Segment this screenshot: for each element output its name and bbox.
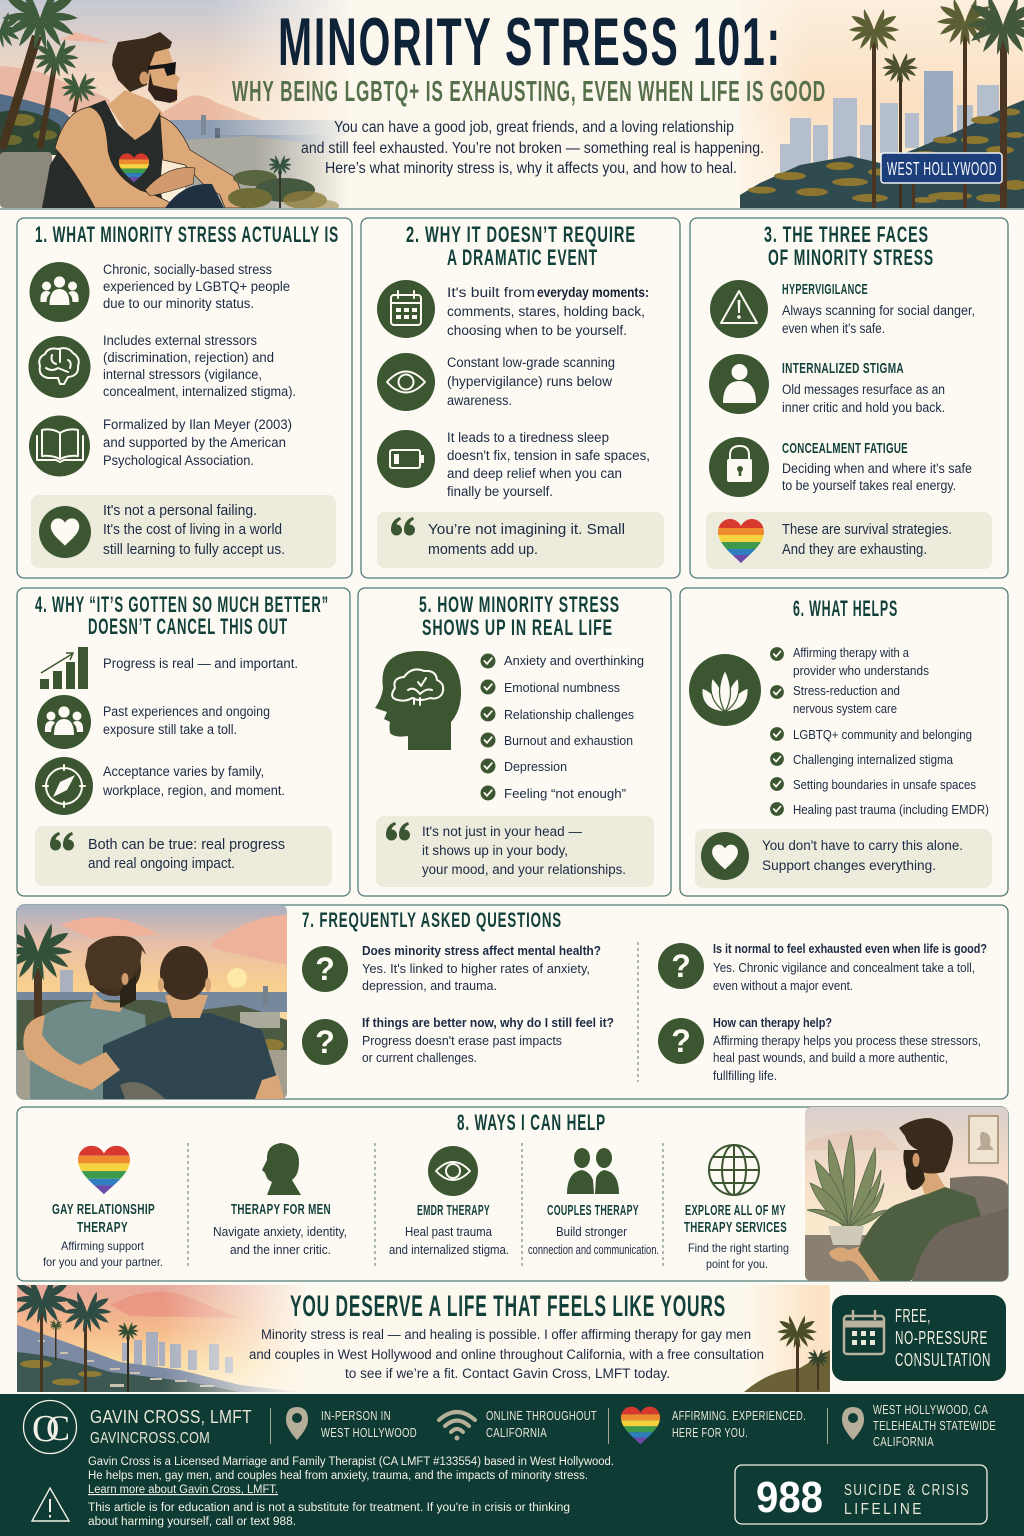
text: stressors: Includes external stressors xyxy=(103,333,257,348)
service: explore all: point for you. xyxy=(706,1257,768,1271)
faq: things are better xyxy=(302,1016,614,1065)
text: acceptance xyxy=(102,764,285,798)
body text: and couples in West Hollywood and online throughout California, with a free consultation xyxy=(249,1347,764,1362)
bio text: Learn more about Gavin Cross, LMFT. xyxy=(88,1484,278,1496)
panel 1: what minority stress actually is xyxy=(17,218,352,578)
location text: CALIFORNIA xyxy=(873,1435,934,1449)
in-person text xyxy=(321,1409,417,1440)
callout: moments add up. xyxy=(428,542,538,558)
callout: These are survival strategies. xyxy=(782,522,952,538)
body text xyxy=(249,1327,764,1381)
checklist: Healing past trauma (including EMDR) xyxy=(793,803,989,817)
callout xyxy=(377,512,664,568)
icon: lock xyxy=(709,437,769,497)
body text: to see if we’re a fit. Contact Gavin Cross, LMFT today. xyxy=(345,1366,670,1381)
faq: exhausted: ? xyxy=(671,948,691,984)
text: internalized stigma: Old messages resurface as an xyxy=(782,382,945,397)
service: gay relationship therapy: THERAPY xyxy=(77,1220,128,1236)
text: concealment fatigue xyxy=(782,440,972,493)
heading: 5. HOW MINORITY STRESS xyxy=(419,592,620,617)
text: hypervigilance: Always scanning for social danger, xyxy=(782,303,975,318)
heading: OF MINORITY STRESS xyxy=(768,245,934,270)
service: therapy for men: THERAPY FOR MEN xyxy=(231,1202,331,1218)
faq: exhausted: Yes. Chronic vigilance and concealment take a toll, xyxy=(713,961,975,975)
icon: calendar xyxy=(377,280,435,338)
callout: Support changes everything. xyxy=(762,858,936,873)
icon: people xyxy=(37,695,91,749)
service: therapy for men: and the inner critic. xyxy=(230,1243,331,1257)
online text: CALIFORNIA xyxy=(486,1426,547,1440)
icon: rising bars xyxy=(40,647,88,689)
heading xyxy=(35,592,329,639)
icon: warning xyxy=(32,1488,69,1521)
footer xyxy=(0,1394,1024,1536)
heading: A DRAMATIC EVENT xyxy=(447,245,598,270)
callout: You don't have to carry this alone. xyxy=(762,838,963,853)
affirming text xyxy=(672,1409,806,1440)
icon: people xyxy=(30,262,90,322)
panel 7: frequently asked questions xyxy=(4,905,1008,1099)
service: gay relationship therapy: Affirming support xyxy=(61,1239,145,1253)
header banner xyxy=(0,0,1024,212)
text: scanning xyxy=(447,355,615,408)
illustration: man in armchair beside plant xyxy=(805,1107,1008,1281)
service: gay relationship therapy xyxy=(43,1145,163,1269)
988 lifeline box: 988 xyxy=(756,1473,823,1522)
icon: eye xyxy=(377,353,435,411)
text: tiredness xyxy=(447,430,650,499)
in-person text: IN-PERSON IN xyxy=(321,1409,391,1423)
faq: exhausted xyxy=(658,942,987,993)
illustration: palms and skyline xyxy=(740,0,1024,208)
faq: mental health: ? xyxy=(315,951,335,987)
checklist xyxy=(480,653,644,801)
text: definition: due to our minority status. xyxy=(103,296,254,311)
text: tiredness: finally be yourself. xyxy=(447,484,553,499)
service: therapy for men: Navigate anxiety, identity, xyxy=(213,1225,347,1239)
consultation button: FREE, xyxy=(895,1306,931,1326)
checklist: Feeling “not enough” xyxy=(504,786,626,801)
text: progress: Progress is real — and important. xyxy=(103,656,298,671)
text: definition: Chronic, socially-based stress xyxy=(103,262,272,277)
callout: It's not a personal failing. xyxy=(103,503,257,519)
intro text: You can have a good job, great friends, and a loving relationship xyxy=(334,119,734,136)
practice name xyxy=(90,1407,252,1447)
callout: You’re not imagining it. Small xyxy=(428,522,625,538)
faq: therapy xyxy=(658,1016,981,1083)
heading xyxy=(764,222,934,270)
faq: mental health: Yes. It's linked to higher rates of anxiety, xyxy=(362,962,590,976)
text: scanning: (hypervigilance) runs below xyxy=(447,374,612,389)
heading: 1. WHAT MINORITY STRESS ACTUALLY IS xyxy=(35,222,339,247)
checklist: Burnout and exhaustion xyxy=(504,733,633,748)
dashed divider xyxy=(637,942,639,1082)
checklist: Challenging internalized stigma xyxy=(793,753,953,767)
body text: Minority stress is real — and healing is possible. I offer affirming therapy for gay men xyxy=(261,1327,751,1342)
service: explore all xyxy=(684,1145,789,1271)
callout: it shows up in your body, xyxy=(422,843,568,858)
service: EMDR therapy xyxy=(389,1146,509,1257)
text: internalized stigma: INTERNALIZED STIGMA xyxy=(782,360,904,377)
intro text xyxy=(301,119,764,177)
text: acceptance: Acceptance varies by family, xyxy=(103,764,264,779)
text: stressors xyxy=(103,333,296,399)
icon: lotus xyxy=(689,654,761,726)
practice name: GAVIN CROSS, LMFT xyxy=(90,1407,252,1427)
disclaimer: about harming yourself, call or text 988. xyxy=(88,1516,296,1528)
service: EMDR therapy: and internalized stigma. xyxy=(389,1243,509,1257)
bio text xyxy=(88,1456,614,1496)
panel 4: why it's gotten so much better doesn't cancel this out xyxy=(17,588,350,896)
faq: therapy: ? xyxy=(671,1023,691,1059)
callout: It's not just in your head — xyxy=(422,824,582,839)
heading: SHOWS UP IN REAL LIFE xyxy=(422,615,613,640)
dashed dividers xyxy=(188,1143,663,1266)
checklist: Anxiety and overthinking xyxy=(504,653,644,668)
location text: WEST HOLLYWOOD, CA xyxy=(873,1403,988,1417)
heading: DOESN’T CANCEL THIS OUT xyxy=(88,614,288,639)
callout: and real ongoing impact. xyxy=(88,856,235,872)
logo monogram xyxy=(24,1400,76,1454)
consultation button xyxy=(832,1295,1006,1381)
panel 2: why it doesn't require a dramatic event xyxy=(361,218,680,578)
heading xyxy=(406,222,636,270)
text: past experiences xyxy=(103,704,270,737)
text: origin: and supported by the American xyxy=(103,435,286,450)
text: tiredness: It leads to a tiredness sleep xyxy=(447,430,609,445)
bio text: Gavin Cross is a Licensed Marriage and Family Therapist (CA LMFT #133554) based in West Hollywood. xyxy=(88,1456,614,1468)
988 lifeline box xyxy=(735,1465,987,1524)
text: origin: Psychological Association. xyxy=(103,453,254,468)
panel 8: ways I can help xyxy=(17,1107,1008,1281)
service: couples therapy: Build stronger xyxy=(556,1225,627,1239)
checklist: nervous system care xyxy=(793,702,897,716)
bio text: He helps men, gay men, and couples heal from anxiety, trauma, and the impacts of minority stress. xyxy=(88,1470,588,1482)
text: everyday moments xyxy=(447,285,649,338)
checklist: Setting boundaries in unsafe spaces xyxy=(793,778,976,792)
text: everyday moments: comments, stares, holding back, xyxy=(447,304,645,319)
callout: It's the cost of living in a world xyxy=(103,522,282,538)
faq: therapy: fullfilling life. xyxy=(713,1069,777,1083)
disclaimer: This article is for education and is not a substitute for treatment. If you're in crisis or thinking xyxy=(88,1502,570,1514)
text: origin: Formalized by Ilan Meyer (2003) xyxy=(103,417,292,432)
text: tiredness: doesn't fix, tension in safe spaces, xyxy=(447,448,650,463)
online text: ONLINE THROUGHOUT xyxy=(486,1409,597,1423)
service: couples therapy: connection and communication. xyxy=(528,1243,659,1257)
callout xyxy=(35,826,332,886)
checklist: Depression xyxy=(504,759,567,774)
illustration: coastal bushes and small palm xyxy=(228,155,339,212)
heading: 7. FREQUENTLY ASKED QUESTIONS xyxy=(302,909,562,932)
icon: low battery xyxy=(377,430,435,488)
panel 6: what helps xyxy=(680,588,1008,896)
checklist: Emotional numbness xyxy=(504,680,620,695)
service: explore all: THERAPY SERVICES xyxy=(684,1220,787,1236)
text: everyday moments: It's built from xyxy=(447,285,535,300)
faq: things are better: If things are better now, why do I still feel it? xyxy=(362,1016,614,1030)
text: scanning: awareness. xyxy=(447,393,512,408)
panel 3: the three faces of minority stress xyxy=(690,218,1008,578)
checklist: Stress-reduction and xyxy=(793,684,900,698)
faq: therapy: How can therapy help? xyxy=(713,1016,832,1030)
callout xyxy=(695,829,992,888)
in-person text: WEST HOLLYWOOD xyxy=(321,1426,417,1440)
service: EMDR therapy: EMDR THERAPY xyxy=(417,1203,490,1219)
faq: mental health: Does minority stress affect mental health? xyxy=(362,944,601,958)
icon: wifi xyxy=(439,1412,475,1440)
faq: exhausted: even without a major event. xyxy=(713,979,853,993)
street sign: West Hollywood xyxy=(881,153,1002,183)
faq: mental health xyxy=(302,944,601,993)
heading: 2. WHY IT DOESN’T REQUIRE xyxy=(406,222,636,247)
service: couples therapy xyxy=(528,1148,659,1257)
text: definition xyxy=(103,262,290,311)
faq: exhausted: Is it normal to feel exhausted even when life is good? xyxy=(713,942,987,956)
heading: 8. WAYS I CAN HELP xyxy=(457,1110,606,1135)
logo monogram: O xyxy=(32,1408,59,1450)
illustration: left sunset scene with man xyxy=(0,0,348,208)
service: explore all: EXPLORE ALL OF MY xyxy=(685,1203,786,1219)
heading: 3. THE THREE FACES xyxy=(764,222,929,247)
disclaimer xyxy=(88,1502,570,1528)
scene fade to cream xyxy=(218,0,348,135)
text: internalized stigma: inner critic and hold you back. xyxy=(782,400,945,415)
checklist: LGBTQ+ community and belonging xyxy=(793,728,972,742)
text: origin xyxy=(103,417,292,468)
callout: And they are exhausting. xyxy=(782,542,927,558)
callout xyxy=(706,512,992,569)
faq: things are better: or current challenges. xyxy=(362,1051,477,1065)
affirming text: AFFIRMING. EXPERIENCED. xyxy=(672,1409,806,1423)
location text xyxy=(873,1403,996,1449)
service: therapy for men xyxy=(213,1143,347,1257)
faq: things are better: ? xyxy=(315,1024,335,1060)
text: past experiences: exposure still take a toll. xyxy=(103,722,237,737)
icon: calendar xyxy=(844,1310,884,1354)
service: couples therapy: COUPLES THERAPY xyxy=(547,1203,639,1219)
heading xyxy=(419,592,620,640)
icon: rainbow heart xyxy=(620,1406,661,1445)
intro text: and still feel exhausted. You’re not broken — something real is happening. xyxy=(301,140,764,157)
text: acceptance: workplace, region, and moment. xyxy=(102,783,285,798)
online text xyxy=(486,1409,597,1440)
icon: person xyxy=(709,354,769,414)
icon: warning triangle xyxy=(710,280,768,338)
text: internalized stigma xyxy=(782,360,945,415)
service: EMDR therapy: Heal past trauma xyxy=(405,1225,492,1239)
checklist: provider who understands xyxy=(793,664,929,678)
service: gay relationship therapy: for you and your partner. xyxy=(43,1255,163,1269)
text: hypervigilance: HYPERVIGILANCE xyxy=(782,281,868,298)
service: explore all: Find the right starting xyxy=(688,1241,789,1255)
faq: things are better: Progress doesn't erase past impacts xyxy=(362,1034,562,1048)
icon: brain xyxy=(28,336,90,398)
heading: 4. WHY “IT’S GOTTEN SO MUCH BETTER” xyxy=(35,592,329,617)
callout xyxy=(31,495,336,568)
checklist: Affirming therapy with a xyxy=(793,646,909,660)
text: concealment fatigue: Deciding when and where it's safe xyxy=(782,461,972,476)
faq: mental health: depression, and trauma. xyxy=(362,979,497,993)
988 lifeline box: LIFELINE xyxy=(844,1501,924,1518)
text: past experiences: Past experiences and ongoing xyxy=(103,704,270,719)
panel 5: how minority stress shows up in real life xyxy=(358,588,671,896)
callout: your mood, and your relationships. xyxy=(422,862,626,877)
text: definition: experienced by LGBTQ+ people xyxy=(103,279,290,294)
checklist xyxy=(770,646,989,817)
logo monogram: C xyxy=(46,1408,70,1448)
text: tiredness: and deep relief when you can xyxy=(447,466,622,481)
intro text: Here’s what minority stress is, why it affects you, and how to heal. xyxy=(325,160,737,177)
illustration: hillside city sunset xyxy=(13,1276,830,1392)
practice name: GAVINCROSS.COM xyxy=(90,1430,210,1447)
988 lifeline box: SUICIDE & CRISIS xyxy=(844,1482,970,1499)
icon: compass xyxy=(35,757,93,815)
icon: head with cloud xyxy=(375,651,461,750)
text: stressors: internal stressors (vigilance, xyxy=(103,367,262,382)
callout: Both can be true: real progress xyxy=(88,837,285,853)
callout: still learning to fully accept us. xyxy=(103,542,285,558)
icon: map pin xyxy=(842,1407,864,1440)
text: stressors: (discrimination, rejection) and xyxy=(103,350,274,365)
text: everyday moments: everyday moments: xyxy=(537,285,649,300)
text: concealment fatigue: CONCEALMENT FATIGUE xyxy=(782,440,908,457)
service: gay relationship therapy: GAY RELATIONSHIP xyxy=(52,1202,155,1218)
text: concealment fatigue: to be yourself takes real energy. xyxy=(782,478,956,493)
icon: book xyxy=(29,416,90,476)
text: scanning: Constant low-grade scanning xyxy=(447,355,615,370)
faq: therapy: Affirming therapy helps you process these stressors, xyxy=(713,1034,981,1048)
text: stressors: concealment, internalized stigma). xyxy=(103,384,296,399)
icon: map pin xyxy=(286,1407,308,1440)
illustration: two men watching sunset xyxy=(4,905,287,1099)
heading: 6. WHAT HELPS xyxy=(793,596,898,621)
call-to-action banner xyxy=(13,1276,1006,1392)
affirming text: HERE FOR YOU. xyxy=(672,1426,748,1440)
text: hypervigilance xyxy=(782,281,975,336)
text: everyday moments: choosing when to be yourself. xyxy=(447,323,627,338)
checklist: Relationship challenges xyxy=(504,707,634,722)
faq: therapy: heal past wounds, and build a more authentic, xyxy=(713,1051,948,1065)
heading: YOU DESERVE A LIFE THAT FEELS LIKE YOURS xyxy=(290,1290,726,1323)
callout xyxy=(376,816,654,887)
text: hypervigilance: even when it's safe. xyxy=(782,321,885,336)
